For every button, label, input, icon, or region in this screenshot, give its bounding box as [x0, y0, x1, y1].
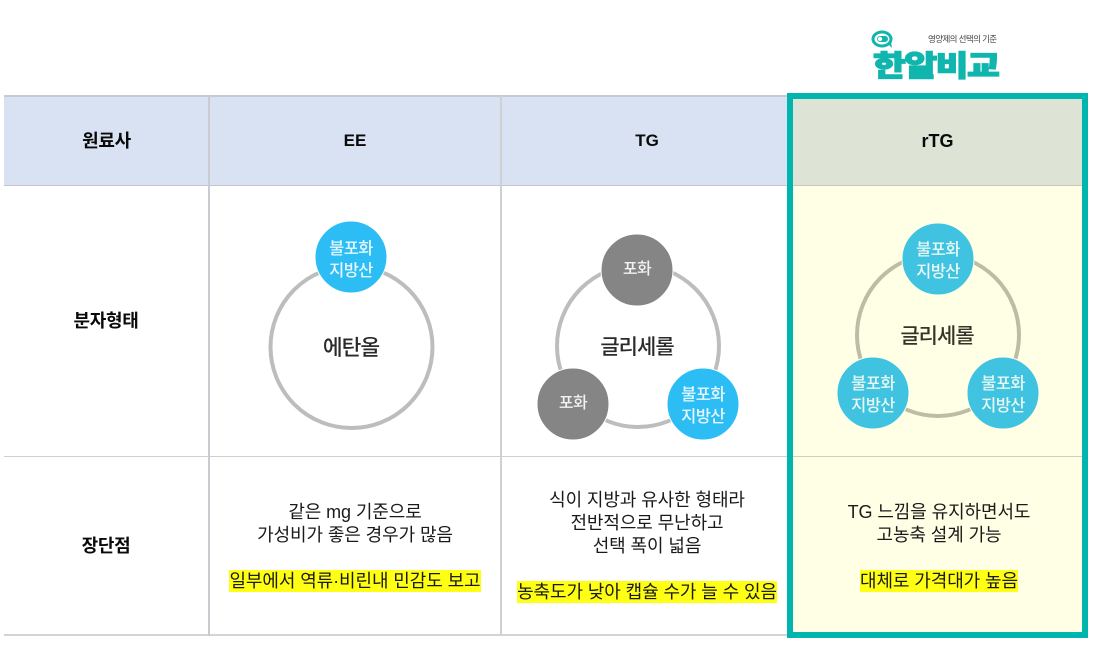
diagram: rTG — [837, 223, 1039, 429]
diagram: TG: 글리세롤 — [600, 336, 674, 359]
icon: speech toggle — [872, 30, 892, 48]
row label: pros and cons: 장단점 — [82, 536, 130, 556]
text: EE pros: 같은 mg 기준으로 — [288, 502, 422, 522]
text: rTG pros: TG 느낌을 유지하면서도 — [848, 502, 1030, 522]
header: EE: EE — [344, 131, 366, 150]
text: EE cons highlighted: 일부에서 역류·비린내 민감도 보고 — [229, 571, 481, 591]
diagram: rTG: 지방산 — [851, 396, 895, 415]
header: raw material label — [4, 97, 209, 185]
text: EE pros: 가성비가 좋은 경우가 많음 — [257, 525, 453, 545]
diagram: TG: 포화 — [623, 260, 652, 278]
rTG column background — [793, 185, 1082, 632]
logo tagline: 영양제의 선택의 기준 — [928, 34, 997, 44]
diagram: TG: 지방산 — [681, 407, 725, 426]
logo wordmark: 한알비교 — [873, 50, 998, 83]
text: EE pros — [257, 502, 453, 545]
header: EE — [209, 97, 501, 185]
header: TG: TG — [635, 131, 659, 150]
header: rTG — [793, 99, 1082, 185]
diagram: TG — [537, 234, 739, 440]
diagram: rTG: 지방산 — [916, 262, 960, 281]
text: TG cons highlighted: 농축도가 낮아 캡슐 수가 늘 수 있음 — [517, 582, 777, 602]
diagram: EE: 불포화 — [329, 239, 373, 258]
text: TG pros — [549, 490, 745, 556]
diagram: EE: 지방산 — [329, 261, 373, 280]
text: rTG cons highlighted: 대체로 가격대가 높음 — [860, 571, 1018, 591]
header: TG — [501, 97, 793, 185]
rTG highlight frame — [787, 93, 1088, 638]
diagram: rTG: 지방산 — [981, 396, 1025, 415]
diagram: EE — [270, 221, 432, 428]
diagram: rTG: 불포화 — [916, 240, 960, 259]
text: TG pros: 식이 지방과 유사한 형태라 — [549, 490, 745, 510]
diagram: rTG: 불포화 — [851, 374, 895, 393]
text: rTG pros: 고농축 설계 가능 — [876, 525, 1002, 545]
logo: hanal bigyo — [872, 30, 1000, 83]
diagram: rTG: 글리세롤 — [900, 325, 974, 348]
diagram: TG: 불포화 — [681, 385, 725, 404]
header: rTG: rTG — [921, 131, 954, 151]
diagram: TG: 포화 — [559, 394, 588, 412]
text: TG pros: 선택 폭이 넓음 — [593, 536, 701, 556]
text: rTG pros — [848, 502, 1030, 545]
diagram: rTG: 불포화 — [981, 374, 1025, 393]
diagram: EE: 에탄올 — [323, 336, 379, 360]
header: raw material label: 원료사 — [82, 131, 131, 151]
text: TG pros: 전반적으로 무난하고 — [570, 513, 724, 533]
row label: molecular form: 분자형태 — [73, 311, 139, 331]
